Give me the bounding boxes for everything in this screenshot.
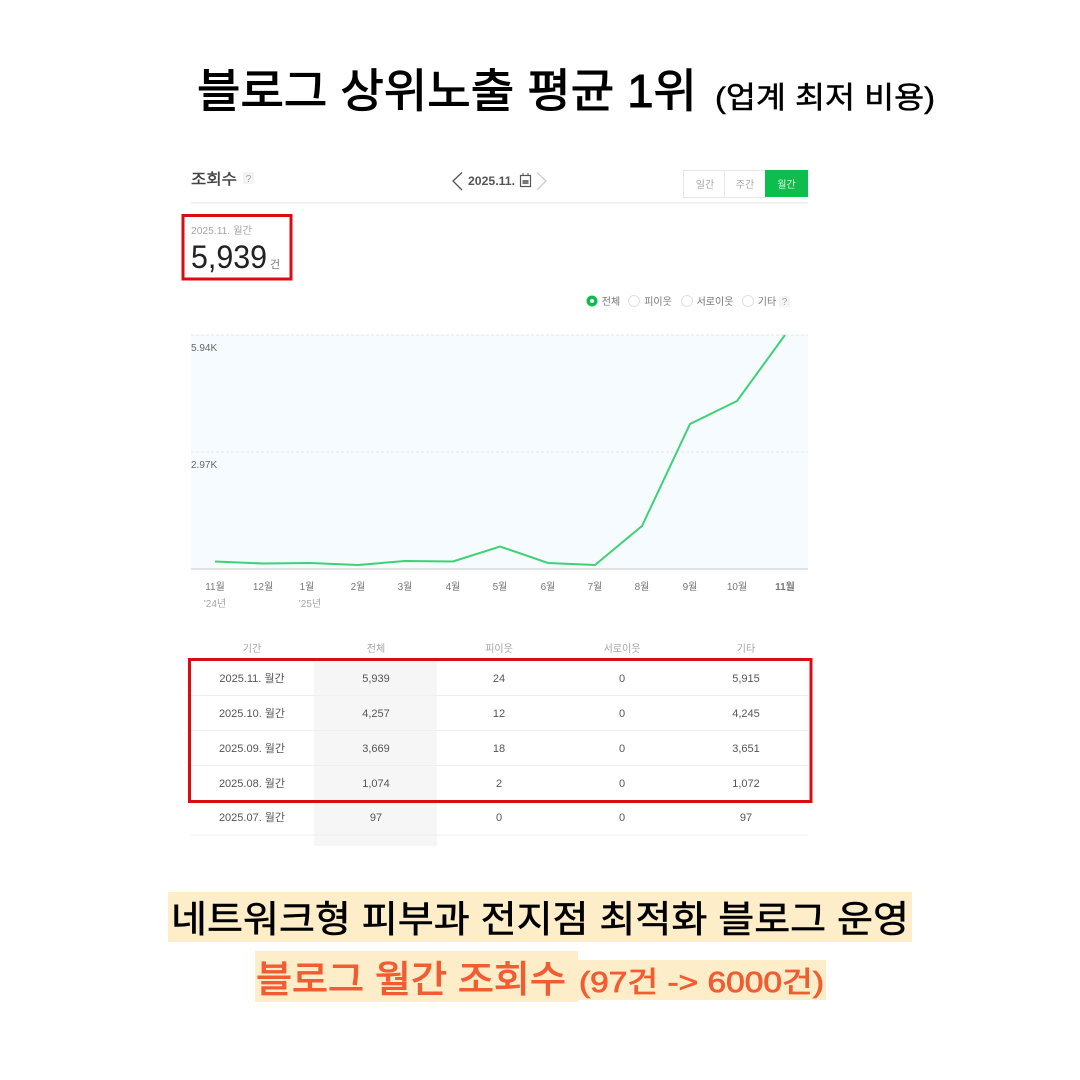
x axis labels: 4월 [446, 581, 460, 593]
chart legend: 기타 [758, 296, 776, 308]
table row: 97 [370, 812, 382, 824]
title: 블로그 상위노출 평균 1위 [197, 65, 697, 117]
table row: 2025.08. 월간 [219, 777, 285, 790]
x axis labels: '25년 [299, 598, 321, 610]
data line [215, 335, 785, 565]
table row: 0 [619, 673, 625, 685]
chart legend [586, 296, 790, 308]
table row: 1,074 [362, 778, 390, 790]
highlighted caption line 2: 블로그 월간 조회수 [256, 959, 566, 1000]
x axis labels: 2월 [351, 581, 365, 593]
period tabs [684, 170, 808, 198]
callout: monthly total: 건 [270, 258, 280, 271]
table row: 0 [619, 708, 625, 720]
x axis labels: 10월 [727, 581, 747, 593]
x axis labels [204, 580, 795, 610]
table header: 서로이웃 [604, 643, 640, 655]
table row: 97 [740, 812, 752, 824]
table row: 4,245 [732, 708, 760, 720]
highlighted caption line 2 [255, 951, 826, 1002]
highlighted caption line 2: (97건 -> 6000건) [579, 967, 824, 999]
date navigator [453, 172, 546, 190]
heading: view count: 조회수 [191, 171, 237, 188]
table row [219, 777, 760, 790]
table row: 2 [496, 778, 502, 790]
table row: 2025.10. 월간 [219, 707, 285, 720]
table row [219, 742, 760, 755]
x axis labels: 11월 [205, 581, 225, 593]
period tabs: 월간 [777, 179, 796, 191]
table row: 2025.07. 월간 [219, 811, 285, 824]
x axis labels: 9월 [683, 581, 697, 593]
table row: 0 [619, 812, 625, 824]
table row: 18 [493, 743, 505, 755]
callout: monthly total: 2025.11. 월간 [191, 225, 252, 237]
line chart [191, 335, 808, 610]
panel: view count header [191, 170, 808, 203]
x axis labels: 5월 [493, 581, 507, 593]
chart legend: 서로이웃 [697, 296, 733, 308]
callout: monthly total: 5,939 [191, 239, 267, 275]
table row: 5,939 [362, 673, 390, 685]
table row: 0 [619, 743, 625, 755]
data table [191, 643, 808, 846]
table row: 5,915 [732, 673, 760, 685]
x axis labels: 7월 [588, 581, 602, 593]
chart legend: 피이웃 [644, 296, 672, 308]
highlighted caption line 1: 네트워크형 피부과 전지점 최적화 블로그 운영 [171, 899, 909, 940]
date navigator: 2025.11. [468, 174, 515, 188]
period tabs: 일간 [696, 179, 714, 191]
callout: highlighted table rows [190, 660, 811, 802]
table row: 4,257 [362, 708, 390, 720]
title [197, 65, 935, 117]
icon: help [243, 172, 254, 185]
table row [219, 672, 760, 685]
table row [219, 707, 760, 720]
table row: 2025.09. 월간 [219, 742, 285, 755]
table row: 1,072 [732, 778, 760, 790]
table row: 3,669 [362, 743, 390, 755]
table row [219, 811, 752, 824]
y axis labels: 2.97K [191, 460, 217, 471]
table row: 3,651 [732, 743, 760, 755]
x axis labels: 1월 [300, 581, 314, 593]
table header: 기타 [737, 643, 755, 655]
table header: 기간 [243, 643, 261, 655]
title: (업계 최저 비용) [715, 82, 935, 115]
period tabs: 주간 [736, 179, 754, 191]
x axis labels: 11월 [775, 580, 795, 593]
icon: help: ? [246, 174, 252, 185]
callout: monthly total [183, 216, 291, 279]
table row: 24 [493, 673, 505, 685]
table header: 피이웃 [485, 643, 513, 655]
table row: 12 [493, 708, 505, 720]
panel: dashboard screenshot [183, 170, 811, 846]
table header: 전체 [367, 643, 385, 655]
table row: 0 [619, 778, 625, 790]
x axis labels: '24년 [204, 598, 226, 610]
y axis labels: 5.94K [191, 343, 217, 354]
chart legend: 전체 [602, 296, 620, 308]
x axis labels: 3월 [398, 581, 412, 593]
x axis labels: 12월 [253, 581, 273, 593]
x axis labels: 8월 [635, 581, 649, 593]
chart legend: ? [782, 297, 788, 308]
table header [243, 643, 755, 655]
x axis labels: 6월 [541, 581, 555, 593]
y axis labels [191, 343, 217, 471]
table row: 2025.11. 월간 [219, 672, 285, 685]
table row: 0 [496, 812, 502, 824]
